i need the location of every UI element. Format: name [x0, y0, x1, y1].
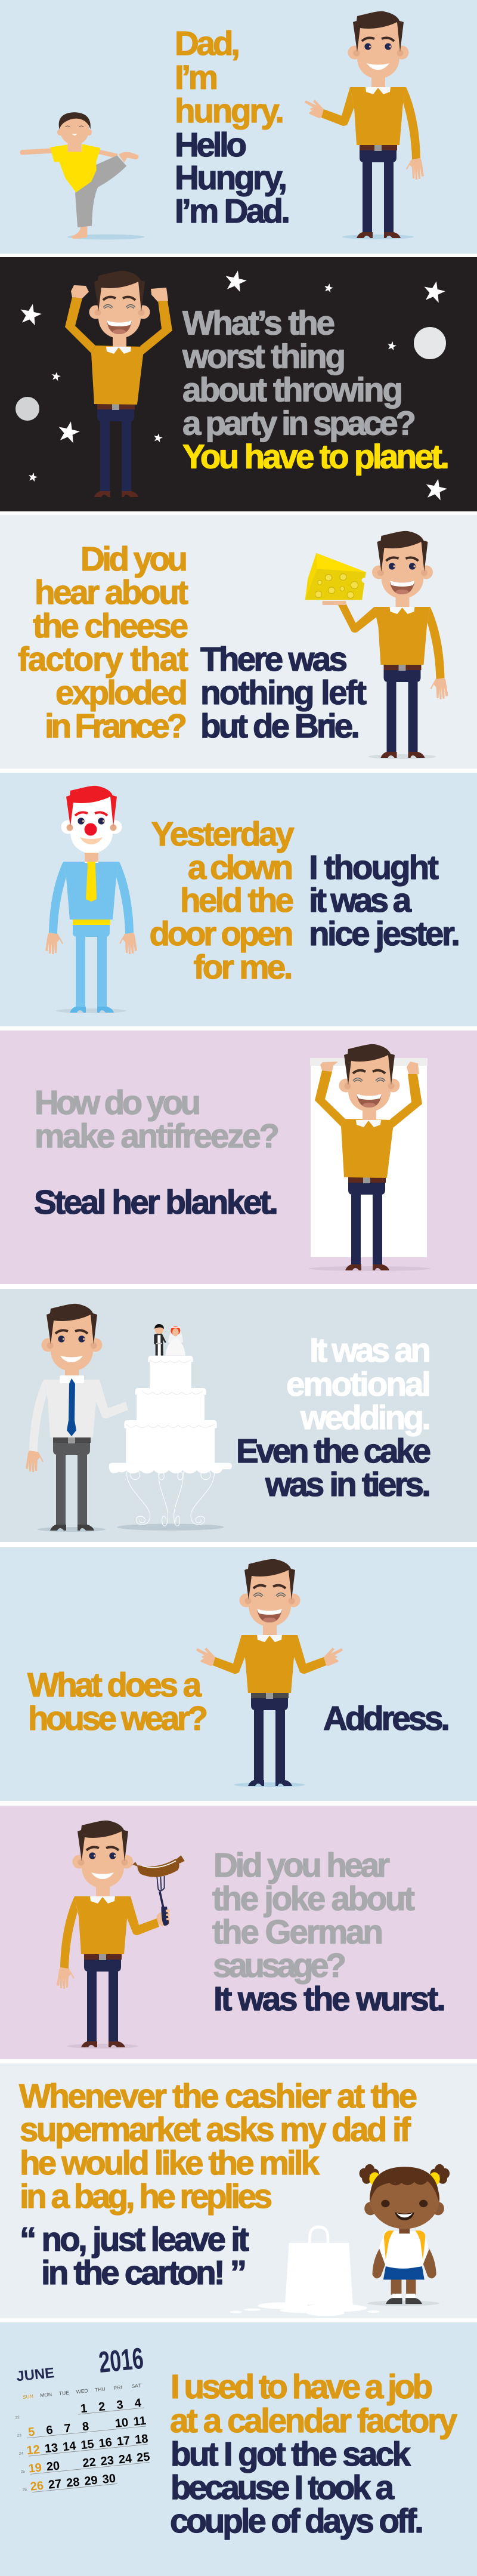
weekday headers — [22, 2382, 141, 2400]
panel: sausage joke — [0, 1806, 477, 2059]
text: question — [182, 304, 416, 442]
text: question: What does a — [27, 1666, 202, 1704]
panel: wedding cake joke — [0, 1289, 477, 2290]
text: answer: Hungry, — [175, 159, 287, 196]
text: answer — [175, 126, 290, 230]
date numbers: 12 — [26, 2443, 41, 2457]
text: answer: I thought — [309, 849, 439, 886]
text: question — [149, 815, 295, 986]
text: answer: Address. — [323, 1699, 450, 1737]
week numbers: 23 — [17, 2433, 22, 2438]
text: setup: I used to have a job — [171, 2368, 433, 2405]
weekday headers: SUN — [22, 2393, 33, 2400]
text: question: factory that — [18, 640, 188, 678]
text: question: a party in space? — [182, 405, 416, 442]
text: answer: There was — [200, 640, 348, 678]
text: setup: at a calendar factory — [170, 2402, 458, 2439]
icon: cake topper couple — [154, 1324, 185, 1356]
text: setup: in a bag, he replies — [20, 2177, 272, 2215]
date numbers: 14 — [62, 2439, 77, 2454]
text: question: Dad, — [175, 24, 240, 62]
text: question: the German — [212, 1913, 383, 1951]
panel: calendar joke — [0, 2322, 477, 2576]
text: question: a clown — [188, 849, 293, 886]
text: setup: he would like the milk — [20, 2144, 320, 2182]
panel: space party joke — [0, 257, 477, 511]
weekday headers: THU — [95, 2386, 106, 2393]
text: question: held the — [180, 881, 294, 919]
illustration: girl with pigtails — [360, 2164, 450, 2306]
panel background — [0, 1547, 477, 1801]
text: punchline: in the carton! ” — [41, 2254, 247, 2291]
text: answer: You have to planet. — [182, 438, 450, 475]
text: answer — [309, 849, 460, 952]
year label: 2016 — [97, 2341, 145, 2379]
icon: cheese wedge — [305, 553, 367, 600]
date numbers: 13 — [44, 2441, 58, 2455]
text: question: How do you — [35, 1084, 201, 1121]
date numbers: 16 — [98, 2436, 113, 2450]
illustration: dad with sausage on fork — [57, 1821, 159, 2049]
weekday headers: SAT — [131, 2382, 141, 2389]
text: setup — [170, 2368, 458, 2439]
text: answer: nice jester. — [309, 915, 460, 952]
text: question: I’m — [175, 58, 218, 96]
date numbers: 27 — [48, 2478, 62, 2492]
panel background — [0, 1031, 477, 1284]
text: question: about throwing — [182, 371, 403, 408]
text: question: house wear? — [28, 1699, 208, 1737]
panel background — [0, 0, 477, 254]
text: question: door open — [149, 915, 293, 952]
text: joke setup: emotional — [286, 1365, 431, 1403]
text: question: Did you — [80, 540, 188, 578]
text: punchline: Even the cake — [236, 1432, 431, 1470]
text: punchline: because I took a — [171, 2469, 395, 2506]
illustration: blanket — [309, 1058, 430, 1271]
week numbers: 26 — [22, 2488, 27, 2492]
text: question: sausage? — [213, 1946, 346, 1984]
panel background — [0, 257, 477, 511]
text: punchline: was in tiers. — [265, 1466, 431, 1503]
text: question — [35, 1084, 280, 1155]
text: question: Did you hear — [213, 1846, 390, 1884]
text: setup: supermarket asks my dad if — [20, 2111, 411, 2148]
weekday headers: MON — [40, 2391, 52, 2398]
text: joke setup: wedding. — [300, 1399, 431, 1436]
panel background — [0, 2063, 477, 2318]
text: question — [175, 24, 284, 129]
panel: milk carton joke — [0, 2063, 477, 2318]
date numbers: 17 — [116, 2434, 131, 2448]
illustration: dad holding blanket — [315, 1044, 422, 1270]
date numbers: 20 — [46, 2459, 60, 2474]
text: punchline: “ no, just leave it — [20, 2220, 249, 2258]
text: answer: but de Brie. — [200, 707, 360, 745]
text: answer — [200, 640, 367, 745]
illustration: dad with raised arms — [65, 271, 172, 497]
text: joke setup — [286, 1331, 431, 1436]
weekday headers: TUE — [58, 2389, 70, 2396]
panel: antifreeze joke — [0, 1031, 477, 1284]
text: setup — [19, 2077, 417, 2215]
date numbers: 24 — [118, 2452, 133, 2466]
illustration: dad pointing — [305, 11, 424, 239]
date numbers: 18 — [134, 2432, 148, 2447]
date numbers: 7 — [64, 2421, 72, 2435]
calendar: June 2016 — [9, 2341, 156, 2494]
date numbers: 8 — [82, 2420, 89, 2433]
date numbers: 11 — [133, 2414, 147, 2429]
date numbers: 28 — [66, 2476, 80, 2490]
text: joke setup: It was an — [309, 1331, 431, 1369]
date numbers: 25 — [136, 2450, 150, 2464]
text: question: for me. — [193, 948, 293, 986]
date numbers: 26 — [30, 2479, 44, 2494]
text: question: worst thing — [182, 338, 346, 375]
illustration: dad holding cheese — [322, 531, 448, 759]
panel background — [0, 2322, 477, 2576]
date numbers: 1 — [80, 2402, 88, 2415]
text: question: Yesterday — [151, 815, 295, 853]
text: answer: it was a — [309, 881, 412, 919]
week numbers: 25 — [20, 2470, 26, 2474]
illustration: clown — [45, 786, 137, 1013]
stars and planets — [16, 269, 449, 501]
text: question: the cheese — [33, 607, 188, 644]
illustration: dad pointing both ways — [196, 1559, 343, 1787]
date numbers: 10 — [114, 2416, 129, 2430]
illustration: wedding cake — [109, 1324, 232, 2290]
panel: dad hungry joke — [0, 0, 477, 254]
panel: cheese joke — [0, 515, 477, 769]
date numbers: 22 — [82, 2455, 97, 2470]
weekday headers: FRI — [114, 2384, 122, 2391]
date numbers: 29 — [83, 2474, 98, 2488]
text: punchline: but I got the sack — [171, 2435, 411, 2473]
date numbers: 2 — [98, 2400, 106, 2414]
date numbers: 19 — [28, 2461, 42, 2476]
date numbers: 30 — [102, 2472, 116, 2486]
date numbers: 3 — [116, 2398, 124, 2412]
panel background — [0, 773, 477, 1026]
text: punchline — [170, 2435, 424, 2540]
text: question: exploded — [55, 674, 188, 711]
text: answer: I’m Dad. — [175, 192, 290, 230]
text: answer: Steal her blanket. — [34, 1183, 278, 1221]
text: question — [212, 1846, 415, 1984]
date numbers — [23, 2396, 153, 2494]
text: question: What’s the — [182, 304, 335, 341]
text: question: the joke about — [212, 1880, 415, 1917]
week numbers — [15, 2415, 27, 2492]
illustration: white bag and spilled milk — [230, 2227, 380, 2316]
illustration: dad pointing at cake — [26, 1304, 128, 1532]
text: punchline — [236, 1432, 431, 1503]
month label: JUNE — [16, 2365, 55, 2384]
date numbers: 23 — [100, 2454, 114, 2468]
panel background — [0, 515, 477, 769]
date numbers: 5 — [27, 2425, 35, 2439]
illustration: boy balancing on one leg — [20, 112, 144, 240]
weekday headers: WED — [76, 2387, 88, 2395]
panel background — [0, 1806, 477, 2059]
date numbers: 4 — [134, 2396, 143, 2410]
week numbers: 22 — [15, 2415, 20, 2420]
text: answer: nothing left — [200, 674, 367, 711]
text: question — [18, 540, 188, 745]
date numbers: 6 — [45, 2423, 54, 2437]
text: question: hear about — [35, 573, 188, 611]
text: question: in France? — [45, 707, 187, 745]
text: answer: Hello — [175, 126, 247, 163]
text: question: hungry. — [175, 92, 284, 129]
icon: sausage on a fork — [132, 1855, 185, 1926]
text: answer: It was the wurst. — [213, 1980, 446, 2017]
week numbers: 24 — [18, 2451, 24, 2456]
panel: clown joke — [0, 773, 477, 1026]
text: question: make antifreeze? — [35, 1117, 280, 1155]
panel: house joke — [0, 1547, 477, 1801]
text: punchline — [20, 2220, 249, 2291]
text: question — [27, 1666, 208, 1737]
text: setup: Whenever the cashier at the — [19, 2077, 417, 2115]
icon: pointing hand — [193, 2271, 212, 2290]
date numbers: 15 — [80, 2438, 95, 2452]
panel background — [0, 1289, 477, 1542]
text: punchline: couple of days off. — [170, 2502, 424, 2540]
